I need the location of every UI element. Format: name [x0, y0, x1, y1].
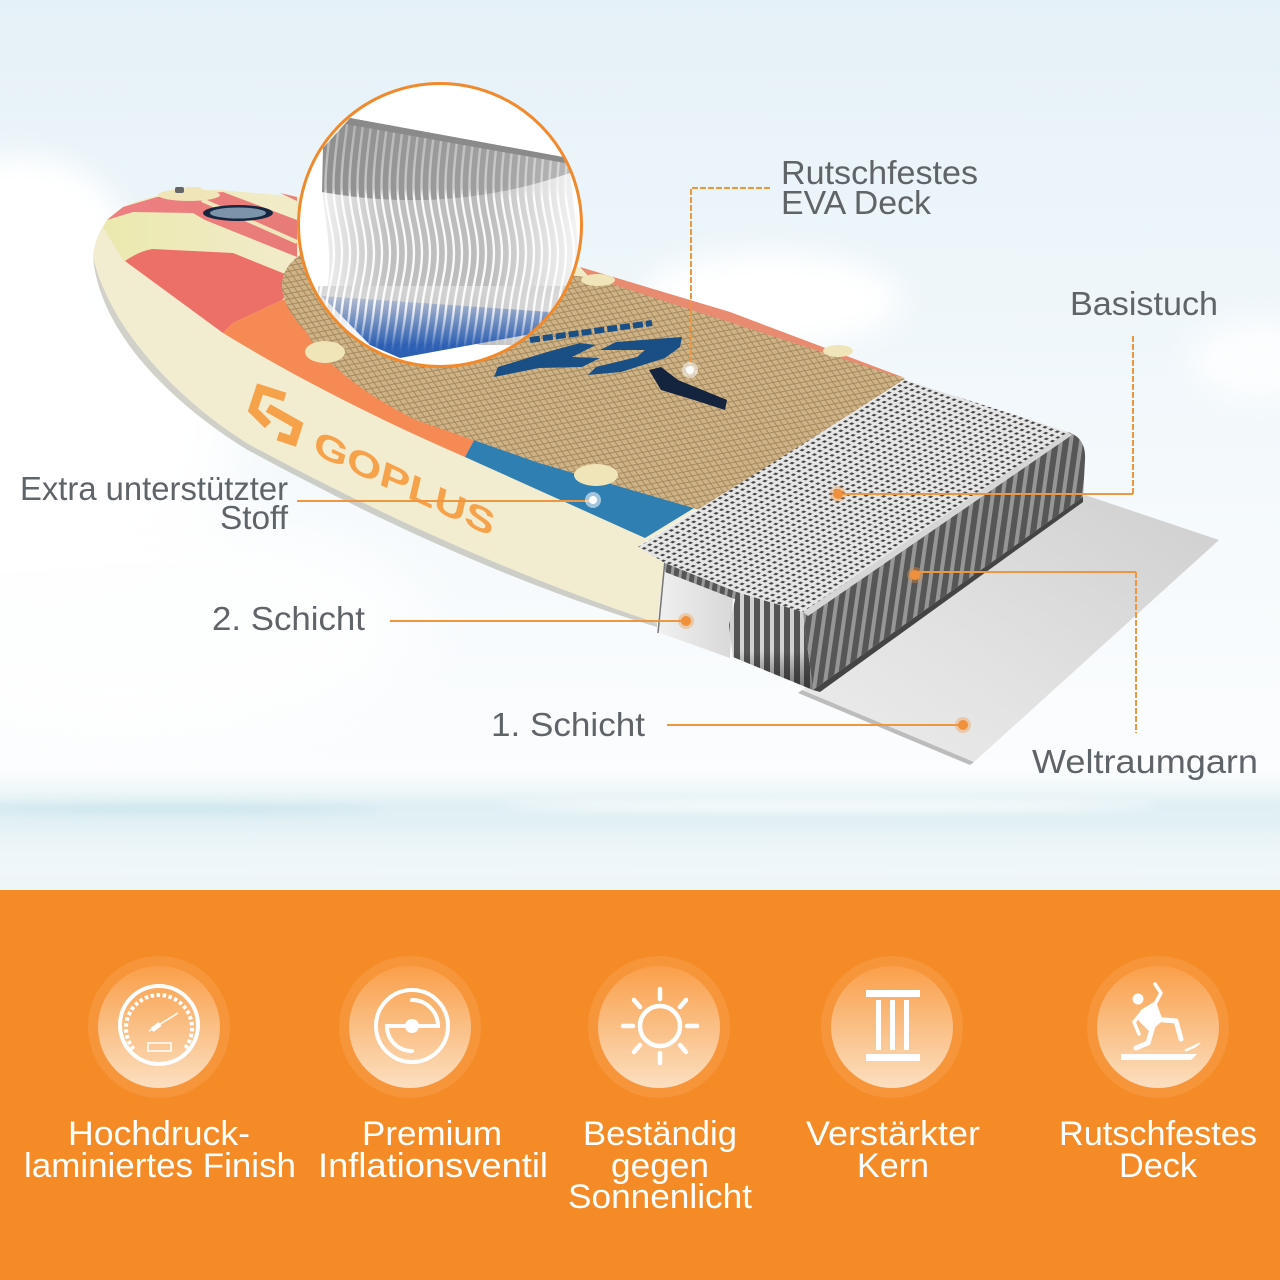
caption: [806, 1115, 980, 1185]
leader: Weltraumgarn: [915, 572, 1136, 733]
second layer section: [658, 572, 733, 658]
caption: [568, 1115, 753, 1216]
icon: valve dial: [376, 990, 448, 1062]
base cloth mesh: [638, 380, 1068, 612]
deck pad: [282, 255, 905, 510]
top pink edge: [580, 267, 905, 378]
feature: Hochdruck-laminiertes Finish: [24, 956, 296, 1185]
caption: [1059, 1115, 1257, 1185]
label: Rutschfestes EVA Deck: EVA Deck: [781, 184, 932, 221]
label: Extra unterstuetzter Stoff: Stoff: [220, 499, 289, 536]
leader: Basistuch: [838, 336, 1133, 494]
blue panel: [465, 433, 712, 538]
brand logo on rail: GOPLUS: [310, 423, 498, 545]
orange feature panel: [0, 890, 1280, 1280]
magnifier: drop-stitch fibres: [298, 84, 590, 366]
cutaway layers: [638, 380, 1219, 765]
caption: Sonnenlicht: [568, 1178, 753, 1216]
caption: Verstärkter: [806, 1115, 980, 1153]
paddle board: [93, 187, 905, 627]
feature: Bestaendig gegen Sonnenlicht: [568, 956, 753, 1216]
yarn side face: [803, 432, 1085, 690]
label: 1. Schicht: 1. Schicht: [491, 706, 645, 743]
orange panel: [223, 300, 478, 457]
callout dots: [585, 362, 971, 733]
feature: Verstaerkter Kern: [806, 956, 980, 1185]
label: Rutschfestes EVA Deck: Rutschfestes: [781, 154, 978, 191]
caption: Rutschfestes: [1059, 1115, 1257, 1153]
label: Basistuch: Basistuch: [1070, 285, 1218, 322]
deck logo: [494, 323, 682, 377]
sea horizon: [0, 770, 1280, 890]
label: Extra unterstuetzter Stoff: Extra unterstützter: [20, 470, 288, 507]
carry handle: [649, 367, 727, 410]
valves: [158, 187, 853, 486]
first layer sheet: [802, 495, 1219, 762]
feature: Premium Inflationsventil: [318, 956, 548, 1185]
icon: pillars: [866, 990, 920, 1061]
caption: Premium: [362, 1115, 502, 1153]
icon: slipping person: [1121, 984, 1200, 1060]
caption: Beständig: [583, 1115, 737, 1153]
leader: 2. Schicht: [390, 620, 683, 622]
yarn front face: [729, 592, 813, 690]
leader: Rutschfestes EVA Deck: [691, 188, 770, 368]
icon: pressure gauge: [120, 986, 198, 1064]
label: Weltraumgarn: Weltraumgarn: [1032, 743, 1258, 780]
caption: Inflationsventil: [318, 1147, 548, 1185]
air valve badge: [203, 205, 273, 221]
caption: laminiertes Finish: [24, 1147, 296, 1185]
leader: Extra unterstuetzter Stoff: [297, 500, 590, 502]
red upper band: [107, 192, 297, 257]
caption: [318, 1115, 548, 1185]
label: Extra unterstuetzter Stoff: [20, 470, 289, 536]
board rail: [93, 190, 905, 623]
label: 2. Schicht: 2. Schicht: [212, 600, 365, 637]
caption: gegen: [611, 1147, 709, 1185]
sky background: [0, 0, 1280, 790]
feature: Rutschfestes Deck: [1059, 956, 1257, 1185]
caption: Hochdruck-: [68, 1115, 250, 1153]
leader: 1. Schicht: [667, 724, 960, 726]
caption: Kern: [857, 1147, 929, 1185]
caption: Deck: [1119, 1147, 1198, 1185]
brand logo on rail: [253, 389, 498, 545]
label: Rutschfestes EVA Deck: [781, 154, 978, 221]
caption: [24, 1115, 296, 1185]
red panel: [125, 249, 300, 333]
yarn strip under cloth: [665, 563, 737, 600]
icon: sun: [623, 989, 697, 1063]
board top surface: [103, 190, 905, 538]
